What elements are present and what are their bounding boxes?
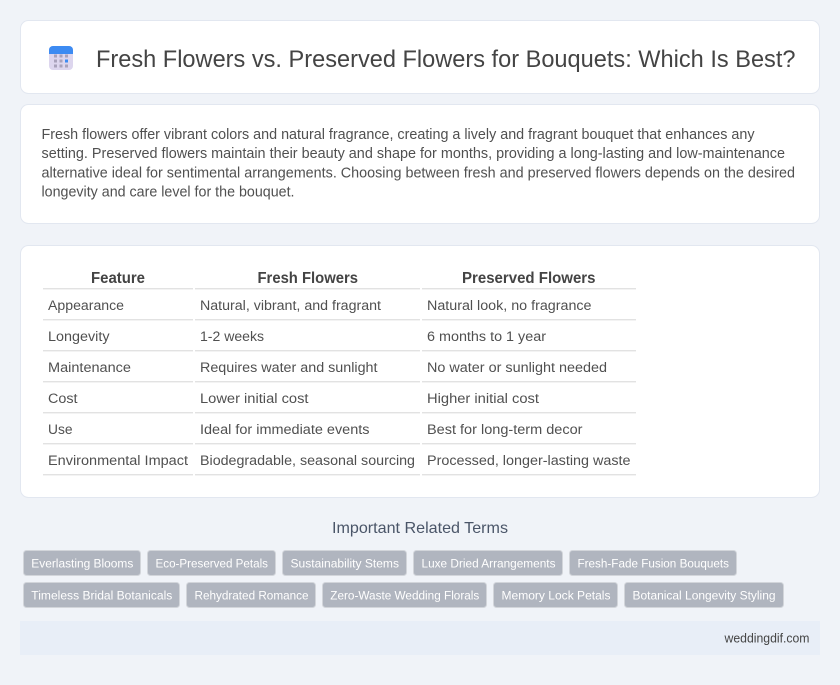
row: use: [43, 422, 636, 444]
tag: Eco-Preserved Petals: [148, 550, 276, 576]
tag: Eco-Preserved Petals: Eco-Preserved Petals: [156, 556, 268, 570]
row: cost: Higher initial cost: [427, 391, 539, 407]
row: maintenance: Requires water and sunlight: [200, 360, 378, 376]
row: appearance: Natural, vibrant, and fragrant: [200, 298, 381, 314]
row: cost: Lower initial cost: [200, 391, 309, 407]
row: maintenance: [43, 360, 636, 382]
row: use: Best for long-term decor: [427, 422, 583, 438]
tag: Luxe Dried Arrangements: [414, 550, 562, 576]
tag: Zero-Waste Wedding Florals: [322, 582, 486, 608]
row: longevity: Longevity: [48, 329, 110, 345]
row: appearance: Appearance: [48, 298, 124, 314]
row: maintenance: Maintenance: [48, 360, 131, 376]
intro paragraph: setting. Preserved flowers maintain their beauty and shape for months, providing a long-lasting and low-maintenance: [42, 146, 785, 162]
tag: Everlasting Blooms: [24, 550, 140, 576]
tag: Fresh-Fade Fusion Bouquets: [570, 550, 736, 576]
tag: Botanical Longevity Styling: Botanical Longevity Styling: [632, 588, 776, 602]
header panel: [20, 20, 820, 94]
tag: Sustainability Stems: [282, 550, 406, 576]
row: maintenance: No water or sunlight needed: [427, 360, 607, 376]
panel: comparison table: [20, 246, 820, 498]
table header row: [43, 270, 636, 289]
row: use: Ideal for immediate events: [200, 422, 370, 438]
row: longevity: 1-2 weeks: [200, 329, 264, 345]
icon: calendar: [49, 46, 73, 70]
intro paragraph: [42, 127, 795, 201]
tag: Luxe Dried Arrangements: Luxe Dried Arrangements: [422, 556, 556, 570]
row: longevity: 6 months to 1 year: [427, 329, 546, 345]
related term tags: [24, 550, 784, 608]
table header row: Feature: [91, 270, 145, 287]
tag: Rehydrated Romance: [186, 582, 316, 608]
row: cost: Cost: [48, 391, 78, 407]
intro paragraph: longevity and care level for the bouquet.: [42, 185, 294, 201]
row: use: Use: [48, 422, 73, 438]
tag: Timeless Bridal Botanicals: Timeless Bridal Botanicals: [31, 588, 172, 602]
tag: Rehydrated Romance: Rehydrated Romance: [194, 588, 309, 602]
tag: Memory Lock Petals: Memory Lock Petals: [502, 588, 610, 602]
intro paragraph: alternative ideal for sentimental arrangements. Choosing between fresh and preserved flowers depends on the desired: [42, 166, 795, 182]
tag: Timeless Bridal Botanicals: [24, 582, 180, 608]
row: longevity: [43, 329, 636, 351]
row: environmental impact: Biodegradable, seasonal sourcing: [200, 453, 415, 469]
tag: Sustainability Stems: Sustainability Stems: [290, 556, 399, 570]
footer bar: [20, 621, 820, 655]
tag: Fresh-Fade Fusion Bouquets: Fresh-Fade Fusion Bouquets: [578, 556, 729, 570]
table header row: Preserved Flowers: [462, 270, 596, 287]
row: appearance: [43, 298, 636, 320]
title: Fresh Flowers vs. Preserved Flowers for Bouquets: Which Is Best?: [96, 46, 796, 73]
table header row: Fresh Flowers: [258, 270, 358, 287]
tag: Everlasting Blooms: Everlasting Blooms: [31, 556, 133, 570]
row: cost: [43, 391, 636, 413]
heading: important related terms: Important Related Terms: [332, 520, 508, 537]
row: environmental impact: Environmental Impact: [48, 453, 188, 469]
row: appearance: Natural look, no fragrance: [427, 298, 592, 314]
row: environmental impact: Processed, longer-lasting waste: [427, 453, 631, 469]
tag: Botanical Longevity Styling: [624, 582, 784, 608]
panel: introduction: [20, 104, 820, 224]
footer source text: weddingdif.com: [724, 630, 810, 646]
intro paragraph: Fresh flowers offer vibrant colors and natural fragrance, creating a lively and fragrant bouquet that enhances any: [42, 127, 755, 143]
row: environmental impact: [43, 453, 636, 475]
tag: Memory Lock Petals: [494, 582, 618, 608]
tag: Zero-Waste Wedding Florals: Zero-Waste Wedding Florals: [330, 588, 479, 602]
